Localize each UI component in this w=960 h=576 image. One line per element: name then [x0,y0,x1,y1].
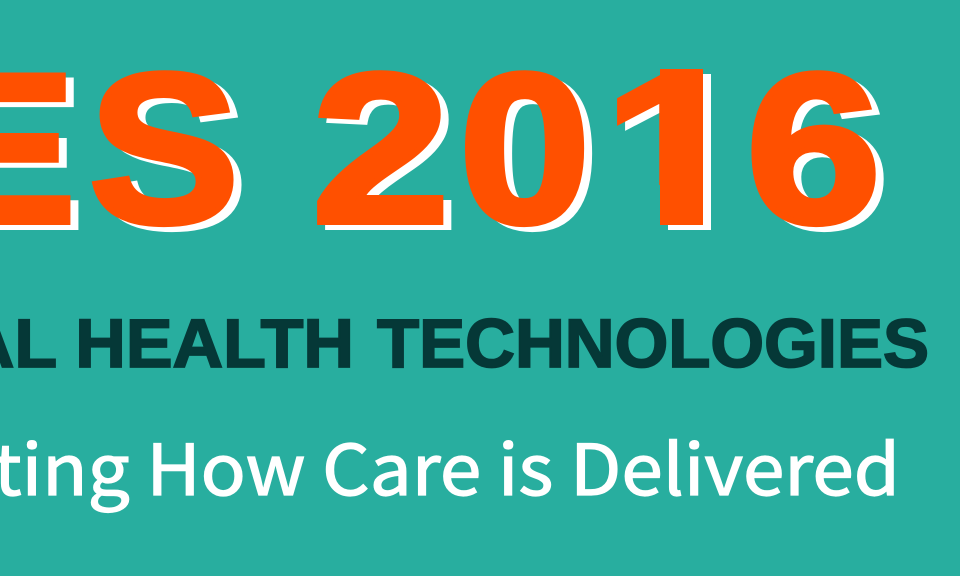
title: white shadow and orange text: S [89,31,239,268]
subtitle [0,304,929,382]
banner [0,69,928,514]
title: white shadow and orange text: S [97,36,247,273]
title: white shadow and orange text: 0 [459,29,591,267]
title: white shadow and orange text: 2 [312,29,450,267]
subtitle: TECHNOLOGIES [377,305,929,382]
tagline: ting How Care is Delivered [0,414,900,515]
title: white shadow and orange text: 6 [754,35,889,273]
title: white shadow and orange text: 1 [610,34,752,272]
title: white shadow and orange text: 0 [467,34,599,272]
title: white shadow and orange text: 1 [602,29,744,267]
title: white shadow and orange text: 6 [746,30,881,268]
title: white shadow and orange text: 2 [320,34,458,272]
title: white shadow and orange text [0,69,884,232]
